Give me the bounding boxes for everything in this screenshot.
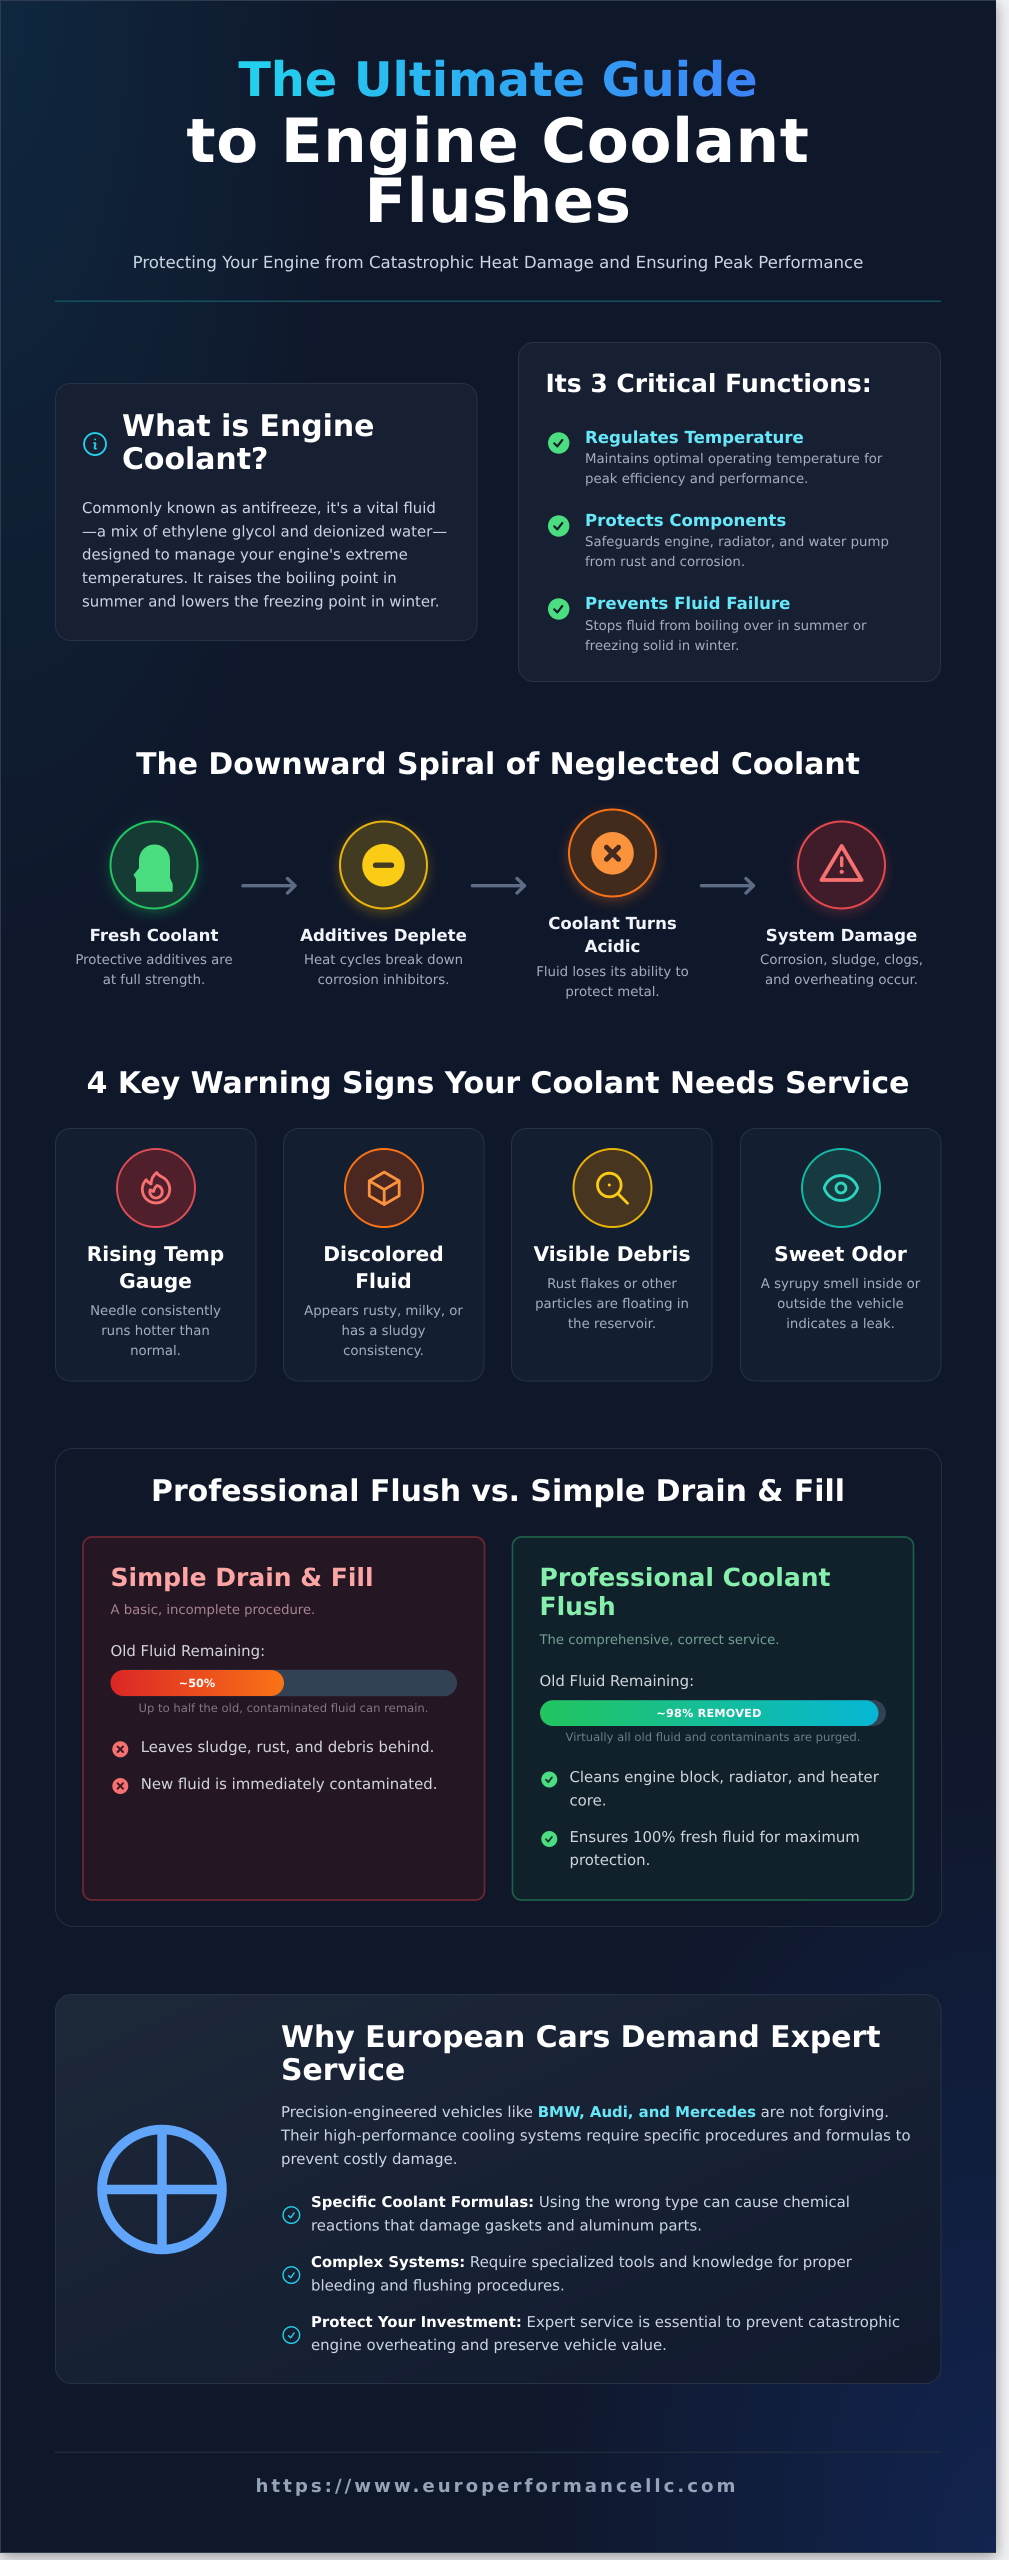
function: prevents fluid failure: Stops fluid from boiling over in summer or	[585, 619, 867, 634]
panel: critical functions	[518, 342, 940, 682]
card: sweet odor: indicates a leak.	[786, 1317, 895, 1332]
heading: Professional Flush vs. Simple Drain & Fill	[151, 1474, 845, 1509]
body text: —a mix of ethylene glycol and deionized water—	[82, 522, 447, 540]
step: additives deplete: corrosion inhibitors.	[318, 973, 449, 988]
heading: downward spiral: The Downward Spiral of Neglected Coolant	[136, 747, 860, 782]
card: visible debris	[512, 1128, 712, 1381]
function: protects components: from rust and corrosion.	[585, 555, 745, 570]
heading: Its 3 Critical Functions:	[546, 369, 872, 398]
panel: simple drain and fill: Up to half the old, contaminated fluid can remain.	[139, 1701, 428, 1715]
card: rising temp gauge: Needle consistently	[90, 1304, 221, 1319]
arrow	[472, 878, 524, 893]
point: protect investment	[283, 2313, 900, 2354]
panel: professional coolant flush: Flush	[540, 1592, 616, 1621]
card: sweet odor: Sweet Odor	[774, 1242, 907, 1266]
heading: warning signs: 4 Key Warning Signs Your Coolant Needs Service	[87, 1066, 909, 1101]
intro text: Their high-performance cooling systems require specific procedures and formulas to	[280, 2126, 911, 2144]
arrow	[702, 878, 754, 893]
step: coolant turns acidic: Fluid loses its ability to	[536, 965, 689, 980]
point: protect investment: Protect Your Investment: Expert service is essential to prevent catastrophic	[311, 2313, 900, 2331]
icon: eye	[824, 1176, 858, 1200]
heading: Coolant?	[122, 442, 268, 477]
function: regulates temperature	[548, 428, 883, 487]
progress bar: about 50 percent: ~50%	[179, 1677, 215, 1690]
step: fresh coolant	[75, 822, 233, 988]
function: protects components	[548, 511, 889, 570]
function: regulates temperature: Maintains optimal operating temperature for	[585, 452, 883, 467]
heading: Why European Cars Demand Expert	[281, 2020, 881, 2055]
progress bar: about 98 percent removed	[540, 1700, 886, 1726]
point: specific formulas: Specific Coolant Formulas: Using the wrong type can cause chemical	[311, 2193, 850, 2211]
list item	[541, 1828, 860, 1869]
card: rising temp gauge: runs hotter than	[101, 1324, 210, 1339]
panel: professional coolant flush: The comprehensive, correct service.	[538, 1633, 779, 1648]
heading	[281, 2020, 881, 2088]
step: additives deplete	[300, 822, 467, 988]
intro text	[280, 2103, 911, 2168]
list item: Cleans engine block, radiator, and heater	[570, 1768, 880, 1786]
step: coolant turns acidic: Acidic	[585, 937, 640, 956]
card: rising temp gauge: Rising Temp	[87, 1242, 224, 1266]
title: to Engine Coolant	[186, 106, 810, 177]
step: system damage: Corrosion, sludge, clogs,	[760, 953, 923, 968]
progress bar: about 98 percent removed: ~98% REMOVED	[656, 1707, 762, 1720]
card: discolored fluid: Discolored	[323, 1242, 444, 1266]
function: prevents fluid failure	[548, 594, 867, 654]
function: regulates temperature: peak efficiency and performance.	[585, 472, 808, 487]
point: specific formulas: reactions that damage gaskets and aluminum parts.	[311, 2216, 702, 2234]
panel: simple drain and fill	[83, 1537, 484, 1900]
card: sweet odor: A syrupy smell inside or	[761, 1277, 921, 1292]
intro text: prevent costly damage.	[281, 2150, 458, 2168]
body text: designed to manage your engine's extreme	[82, 546, 408, 564]
step: additives deplete: Additives Deplete	[300, 926, 467, 945]
subtitle: Protecting Your Engine from Catastrophic Heat Damage and Ensuring Peak Performance	[133, 253, 863, 272]
panel: flush comparison	[56, 1448, 942, 1926]
card: discolored fluid: Fluid	[355, 1269, 412, 1293]
card: discolored fluid: has a sludgy	[342, 1324, 426, 1339]
body text	[82, 499, 447, 610]
list item: Leaves sludge, rust, and debris behind.	[141, 1738, 434, 1756]
card: visible debris: particles are floating in	[535, 1297, 689, 1312]
step: fresh coolant: Fresh Coolant	[90, 926, 218, 945]
step: system damage	[760, 822, 923, 988]
panel: simple drain and fill: Old Fluid Remaining:	[110, 1642, 265, 1660]
icon: crossed circle	[98, 2125, 226, 2254]
point: specific formulas	[283, 2193, 850, 2234]
panel: professional coolant flush: Professional Coolant	[540, 1563, 831, 1592]
function: prevents fluid failure: Prevents Fluid Failure	[585, 594, 790, 613]
list item: Ensures 100% fresh fluid for maximum	[570, 1828, 860, 1846]
title: Flushes	[365, 166, 631, 237]
card: visible debris: Visible Debris	[533, 1242, 691, 1266]
panel: professional coolant flush: Virtually all old fluid and contaminants are purged.	[566, 1730, 860, 1744]
heading	[122, 409, 374, 477]
panel: professional coolant flush	[512, 1537, 914, 1900]
step: system damage: and overheating occur.	[765, 973, 918, 988]
heading: What is Engine	[122, 409, 374, 444]
list item: New fluid is immediately contaminated.	[141, 1775, 437, 1793]
point: complex systems: Complex Systems: Require specialized tools and knowledge for proper	[311, 2253, 853, 2271]
card: discolored fluid	[284, 1128, 484, 1381]
body text: Commonly known as antifreeze, it's a vital fluid	[82, 499, 436, 517]
card: discolored fluid: consistency.	[343, 1344, 424, 1359]
point: protect investment: engine overheating and preserve vehicle value.	[311, 2336, 667, 2354]
body text: summer and lowers the freezing point in winter.	[82, 592, 440, 610]
card: visible debris: Rust flakes or other	[547, 1277, 677, 1292]
point: complex systems	[283, 2253, 853, 2294]
step: fresh coolant: Protective additives are	[75, 953, 233, 968]
progress bar: about 50 percent	[110, 1670, 457, 1696]
function: protects components: Safeguards engine, radiator, and water pump	[585, 535, 889, 550]
step: coolant turns acidic: Coolant Turns	[548, 914, 677, 933]
list item	[541, 1768, 880, 1810]
icon: flame	[142, 1173, 170, 1203]
function: protects components: Protects Components	[585, 511, 786, 530]
panel: what is engine coolant	[56, 384, 477, 640]
panel: european cars	[56, 1994, 941, 2384]
function: prevents fluid failure: freezing solid in winter.	[585, 639, 739, 654]
point: complex systems: bleeding and flushing procedures.	[311, 2276, 565, 2294]
body text: temperatures. It raises the boiling point in	[82, 569, 397, 587]
arrow	[243, 878, 295, 893]
card: rising temp gauge: normal.	[130, 1344, 181, 1359]
card: rising temp gauge: Gauge	[119, 1269, 192, 1293]
step: additives deplete: Heat cycles break down	[304, 953, 463, 968]
step: system damage: System Damage	[766, 926, 917, 945]
title: The Ultimate Guide	[238, 53, 758, 108]
card: sweet odor: outside the vehicle	[777, 1297, 904, 1312]
card: discolored fluid: Appears rusty, milky, or	[304, 1304, 463, 1319]
list item: protection.	[570, 1851, 650, 1869]
card: rising temp gauge	[56, 1128, 256, 1381]
step: coolant turns acidic: protect metal.	[565, 985, 660, 1000]
card: sweet odor	[740, 1128, 941, 1381]
icon: info	[84, 433, 106, 455]
title	[186, 53, 810, 237]
footer url: https://www.europerformancellc.com	[255, 2476, 739, 2497]
panel: simple drain and fill: A basic, incomplete procedure.	[110, 1603, 315, 1618]
step: coolant turns acidic	[536, 810, 689, 1000]
icon: magnifier	[598, 1173, 628, 1203]
intro text: Precision-engineered vehicles like BMW, Audi, and Mercedes are not forgiving.	[281, 2103, 889, 2121]
list item: core.	[570, 1792, 606, 1810]
panel: professional coolant flush: Old Fluid Remaining:	[540, 1672, 694, 1690]
function: regulates temperature: Regulates Temperature	[585, 428, 804, 447]
card: visible debris: the reservoir.	[568, 1317, 656, 1332]
step: fresh coolant: at full strength.	[103, 973, 205, 988]
icon: cube	[369, 1172, 399, 1205]
panel: simple drain and fill: Simple Drain & Fill	[110, 1563, 374, 1592]
heading: Service	[281, 2053, 405, 2088]
